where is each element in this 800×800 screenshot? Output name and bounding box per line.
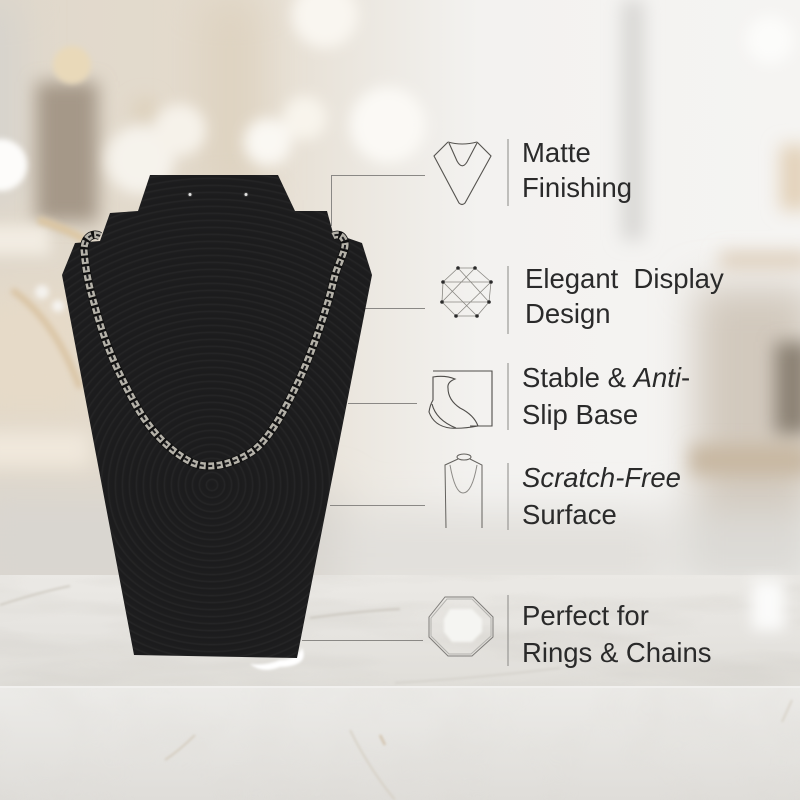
blurred boutique background: [0, 0, 800, 600]
divider: [508, 139, 509, 206]
label: Stable &: [522, 362, 634, 393]
divider: [508, 463, 509, 530]
necklace chain: [84, 235, 345, 466]
divider: [508, 595, 509, 666]
label: Slip Base: [522, 399, 638, 430]
label: Scratch-Free: [522, 462, 681, 493]
marble counter front: [0, 686, 800, 800]
black display stand: [62, 175, 372, 658]
feature: Stable and Anti-Slip Base: [429, 362, 690, 430]
icon: gem network: [440, 266, 493, 318]
divider: [508, 266, 509, 334]
label: Matte: [522, 137, 591, 168]
feature: Matte Finishing: [434, 137, 632, 206]
feature: Elegant Display Design: [440, 263, 724, 334]
label: Design: [525, 298, 611, 329]
icon: stand bust outline: [434, 142, 491, 204]
marble counter top: [0, 575, 800, 687]
icon: octagon ring: [429, 597, 493, 656]
earring holes: [188, 192, 248, 196]
feature: Scratch-Free Surface: [445, 454, 681, 530]
label: Perfect for: [522, 600, 649, 631]
label: Surface: [522, 499, 617, 530]
divider: [508, 363, 509, 430]
label: Finishing: [522, 172, 632, 203]
icon: base in frame: [429, 371, 492, 428]
connector lines: [302, 176, 425, 640]
label: Elegant Display: [525, 263, 724, 294]
table reflection glare: [250, 648, 304, 670]
icon: neck form with necklace: [445, 454, 482, 528]
label: Anti-: [634, 362, 690, 393]
feature: Perfect for Rings and Chains: [429, 595, 712, 668]
label: Rings & Chains: [522, 637, 712, 668]
